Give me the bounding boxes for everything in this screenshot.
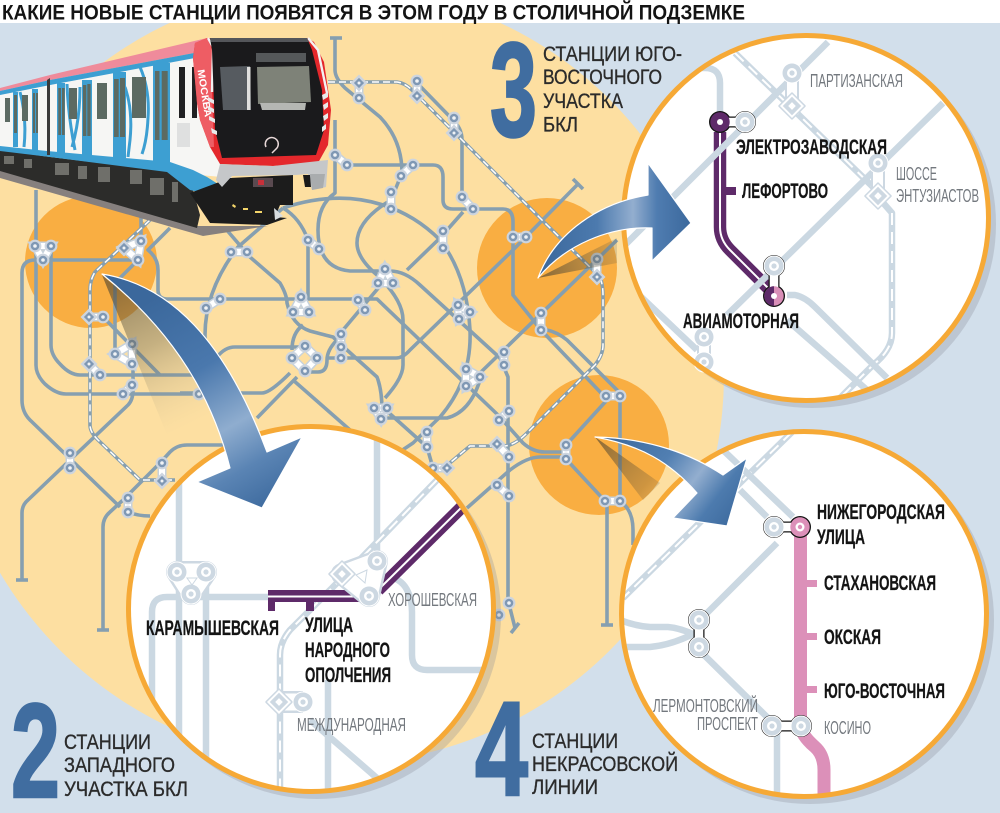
callout 2: west BKL section: УЧАСТКА БКЛ: [64, 778, 188, 801]
metro train illustration: [0, 38, 331, 236]
metro map: [16, 38, 633, 633]
roof: [0, 38, 207, 91]
callout 3: south-east BKL section: БКЛ: [543, 114, 578, 136]
cab door windows: [179, 67, 197, 118]
track: [0, 169, 268, 236]
lens: south-east BKL section: [623, 35, 996, 408]
purple line: Elektrozavodskaya to Aviamotornaya: [720, 132, 772, 292]
stations in lens: [694, 62, 892, 372]
callout 3: south-east BKL section: УЧАСТКА: [543, 90, 623, 113]
callout 2: west BKL section: ЗАПАДНОГО: [64, 754, 175, 777]
cab chevrons: [208, 92, 328, 135]
station connectors: [35, 81, 620, 512]
stations in lens: [166, 550, 388, 716]
undercarriage mottling: [4, 156, 178, 202]
doors: [13, 63, 170, 163]
pink line: Nizhegorodskaya to Kosino: [800, 530, 824, 800]
labels: МЕЖДУНАРОДНАЯ: [297, 715, 406, 735]
callout 4: Nekrasovskaya line: СТАНЦИИ: [532, 730, 618, 753]
pale background lines: [620, 432, 824, 800]
title: КАКИЕ НОВЫЕ СТАНЦИИ ПОЯВЯТСЯ В ЭТОМ ГОДУ В СТОЛИЧНОЙ ПОДЗЕМКЕ: [2, 0, 745, 24]
callout 4: Nekrasovskaya line: [475, 675, 678, 813]
labels: АВИАМОТОРНАЯ: [683, 310, 799, 333]
labels: СТАХАНОВСКАЯ: [824, 572, 936, 595]
coupler details: [232, 178, 283, 220]
train name: МОСКВА: [195, 69, 213, 118]
labels: ОПОЛЧЕНИЯ: [305, 664, 391, 687]
pale background lines: [623, 42, 943, 405]
callout 3: south-east BKL section: 3: [490, 16, 537, 165]
stations in lens: [688, 516, 812, 737]
labels: ПРОСПЕКТ: [697, 714, 758, 734]
pale background lines: [152, 430, 490, 795]
metro logo: [265, 138, 278, 153]
cab windows: [220, 53, 311, 110]
labels: ЛЕФОРТОВО: [742, 180, 828, 203]
lens ring: [624, 36, 988, 400]
arrow to south-east section: [538, 163, 691, 278]
lower blue band: [0, 146, 218, 194]
cab white side strips: [208, 38, 327, 93]
side panel: [177, 123, 190, 147]
lens ring: [622, 432, 986, 796]
bumper: [216, 160, 328, 190]
lens ring: [128, 426, 494, 792]
labels: [653, 501, 945, 738]
roof blue strip: [0, 53, 195, 95]
labels: НАРОДНОГО: [305, 639, 390, 662]
lens: Nekrasovskaya line: [620, 431, 994, 804]
cab red contour: [193, 38, 331, 166]
blue swirl livery: [20, 67, 148, 157]
cab left pink panel: [193, 38, 214, 147]
callout 4: Nekrasovskaya line: ЛИНИИ: [532, 776, 598, 799]
car body side: [0, 57, 232, 178]
cab front: [210, 38, 324, 158]
labels: ШОССЕ: [896, 164, 937, 184]
undercarriage side: [0, 150, 200, 228]
callout 3: south-east BKL section: [490, 16, 682, 165]
callout 3: south-east BKL section: ВОСТОЧНОГО: [543, 66, 662, 89]
station markers: [29, 75, 626, 621]
cab roof edge: [210, 38, 309, 42]
arrow to Nekrasovskaya section: [595, 437, 747, 526]
labels: ЭЛЕКТРОЗАВОДСКАЯ: [736, 136, 887, 159]
labels: [683, 71, 979, 333]
labels: УЛИЦА: [817, 526, 865, 549]
labels: ПАРТИЗАНСКАЯ: [810, 71, 903, 91]
header strip: [0, 0, 1000, 23]
labels: КАРАМЫШЕВСКАЯ: [146, 617, 279, 640]
buffer: [303, 174, 325, 190]
metro lines: [16, 38, 633, 633]
callout 2: west BKL section: [11, 677, 188, 813]
labels: ХОРОШЕВСКАЯ: [388, 590, 477, 610]
dashed MCD lines: [90, 82, 603, 480]
labels: КОСИНО: [824, 718, 871, 738]
door and side windows: [5, 71, 168, 140]
callout 3: south-east BKL section: СТАНЦИИ ЮГО-: [543, 43, 682, 66]
arrow to west section: [102, 274, 302, 508]
callout 2: west BKL section: СТАНЦИИ: [64, 731, 151, 754]
big beige circle: Moscow area: [0, 0, 724, 764]
callout 4: Nekrasovskaya line: НЕКРАСОВСКОЙ: [532, 752, 678, 776]
purple line: Khoroshevskaya to Karamyshevskaya: [268, 499, 470, 611]
cab undercarriage: [190, 175, 293, 225]
orange highlight zones: [25, 196, 669, 515]
car coupling gap: [47, 78, 50, 155]
labels: ЛЕРМОНТОВСКИЙ: [653, 695, 758, 716]
labels: [146, 590, 477, 735]
labels: ОКСКАЯ: [824, 626, 881, 649]
labels: УЛИЦА: [305, 614, 353, 637]
lens: west BKL section: [128, 426, 501, 799]
